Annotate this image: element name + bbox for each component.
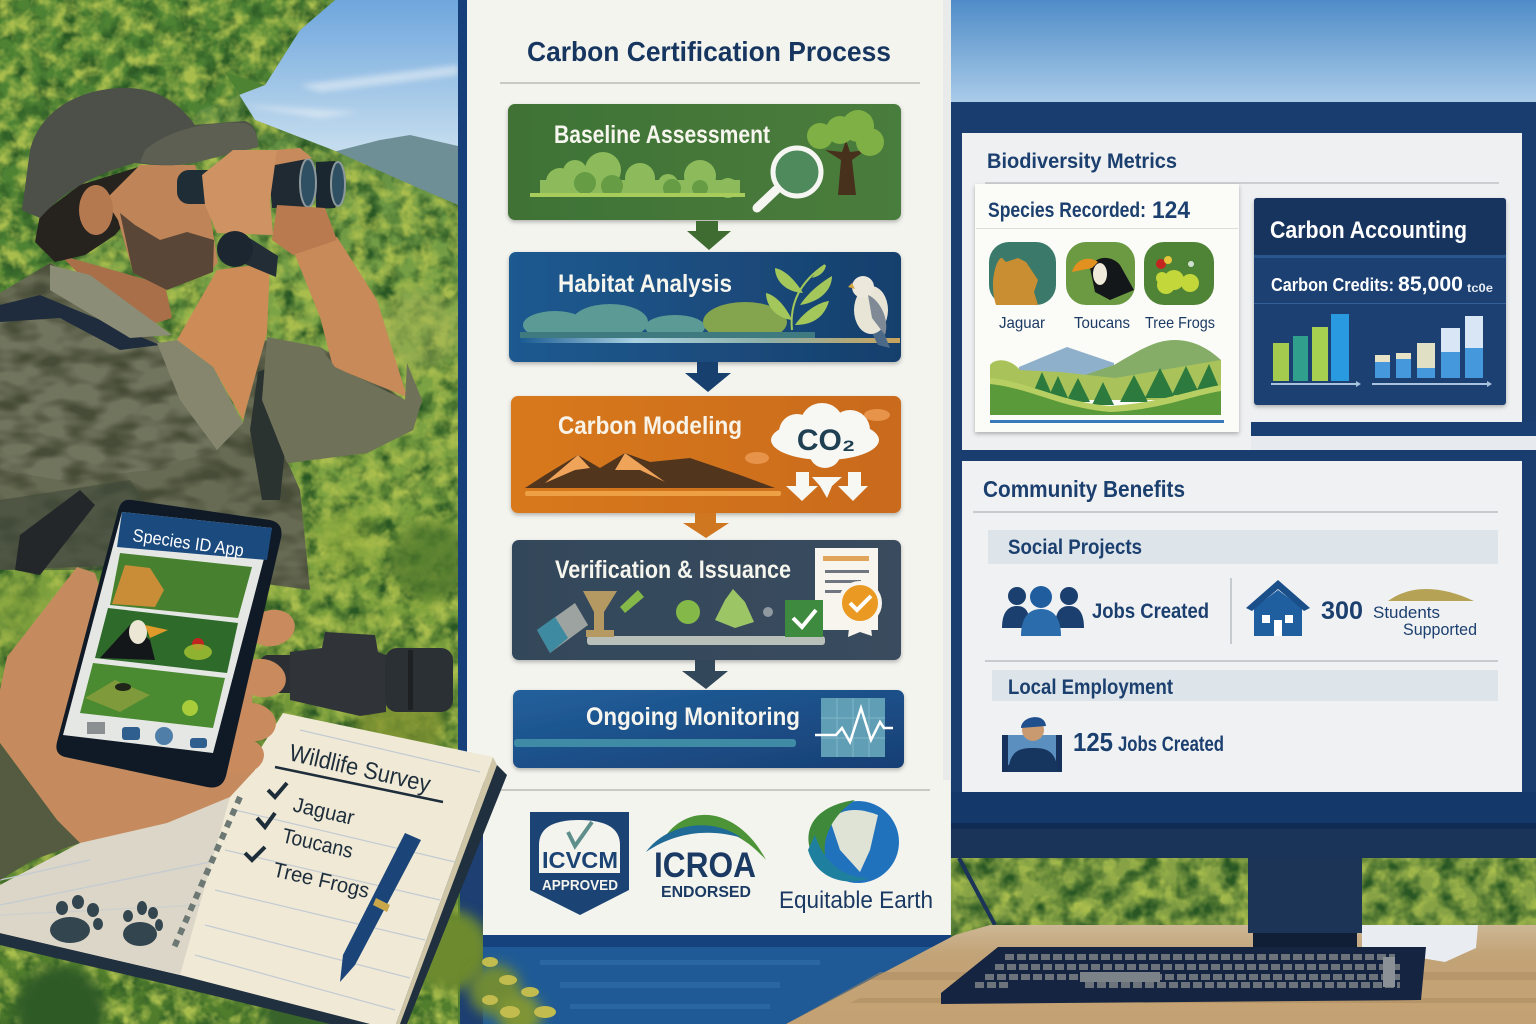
card: species recorded: 124 bbox=[1152, 197, 1191, 224]
icon: plant bbox=[766, 265, 832, 330]
fingers bbox=[215, 606, 298, 776]
arrow bbox=[687, 221, 731, 250]
icon: jaguar bbox=[989, 242, 1056, 305]
step 5: ongoing monitoring: Ongoing Monitoring bbox=[586, 703, 800, 731]
card: carbon accounting: Carbon Accounting bbox=[1270, 217, 1467, 244]
neck bbox=[60, 255, 172, 325]
card: species recorded: Species Recorded: bbox=[988, 199, 1146, 222]
card: species recorded: Toucans bbox=[1074, 315, 1130, 332]
sub-panel: social projects: Supported bbox=[1403, 620, 1477, 639]
monitor bbox=[951, 102, 1536, 962]
near hand bbox=[202, 150, 277, 235]
face bbox=[105, 165, 218, 287]
keyboard bbox=[941, 947, 1426, 1004]
icon: toucan bbox=[1066, 242, 1135, 305]
near rolled cuff bbox=[157, 340, 243, 450]
step 4: verification & issuance: Verification & Issuance bbox=[555, 556, 791, 584]
badge: Equitable Earth bbox=[779, 800, 933, 914]
badge: ICVCM approved: ICVCM bbox=[542, 847, 618, 873]
photo: field researcher with binoculars bbox=[0, 88, 430, 590]
sub-panel: local employment: Local Employment bbox=[1008, 676, 1173, 699]
forearm: far arm bbox=[293, 237, 407, 397]
icon: CO2 cloud bbox=[771, 403, 879, 468]
app tab bar bbox=[87, 722, 207, 748]
hair bbox=[35, 165, 145, 262]
wristwatch bbox=[217, 231, 278, 277]
sleeve cuff bbox=[0, 743, 80, 880]
heading: Carbon Certification Process bbox=[527, 36, 891, 67]
arrow bbox=[685, 362, 731, 392]
panel: community benefits bbox=[962, 461, 1522, 792]
foliage over water bbox=[469, 964, 542, 1024]
ear bbox=[79, 185, 113, 235]
monitor stand bbox=[1248, 858, 1362, 933]
icon: worker bbox=[1002, 717, 1062, 772]
far hand bbox=[272, 205, 337, 255]
heading: Community Benefits bbox=[983, 476, 1185, 502]
binoculars bbox=[177, 158, 345, 209]
icon: down arrows bbox=[786, 472, 868, 501]
notebook: wildlife survey: Tree Frogs bbox=[271, 858, 372, 903]
sub-panel: social projects: Students bbox=[1373, 603, 1440, 622]
phone bbox=[56, 500, 282, 788]
step 5: ongoing monitoring bbox=[513, 690, 904, 768]
arrow bbox=[683, 513, 729, 538]
step 2: habitat analysis: Habitat Analysis bbox=[558, 270, 732, 298]
collar bbox=[50, 265, 172, 338]
spiral binding bbox=[173, 797, 240, 950]
card: carbon accounting: tc0e bbox=[1467, 281, 1493, 295]
step 1: baseline assessment bbox=[508, 104, 901, 220]
arrow bbox=[682, 660, 728, 689]
icon: tree bbox=[825, 140, 866, 195]
step 3: carbon modeling: CO₂ bbox=[797, 424, 855, 457]
forearm: near arm bbox=[177, 263, 270, 420]
step 4: verification & issuance bbox=[512, 540, 901, 660]
badge: ICROA endorsed bbox=[646, 815, 766, 901]
panel: carbon certification process bbox=[458, 0, 955, 1024]
sub-panel: social projects bbox=[988, 530, 1498, 644]
icon: school house bbox=[1246, 580, 1310, 636]
badge: ICVCM approved: APPROVED bbox=[542, 877, 618, 894]
sub-panel: local employment: Jobs Created bbox=[1118, 733, 1224, 756]
notebook: wildlife survey bbox=[0, 713, 507, 1024]
card: carbon accounting: Carbon Credits: bbox=[1271, 275, 1394, 295]
pen bbox=[340, 833, 421, 982]
card: carbon accounting bbox=[1254, 198, 1506, 405]
sub-panel: social projects: Jobs Created bbox=[1092, 600, 1209, 623]
water below panel bbox=[483, 935, 955, 1024]
card: species recorded: Tree Frogs bbox=[1145, 315, 1215, 332]
icon: magnifier bbox=[773, 148, 821, 196]
torso: olive shirt bbox=[0, 263, 422, 590]
background: sky behind monitor bbox=[951, 0, 1536, 938]
card: carbon accounting: 85,000 bbox=[1398, 273, 1463, 296]
badge: ICROA endorsed: ICROA bbox=[654, 846, 756, 885]
notebook: wildlife survey: Jaguar bbox=[291, 793, 356, 830]
card: species recorded: Jaguar bbox=[999, 315, 1046, 332]
camera with lens bbox=[260, 632, 453, 716]
sub-panel: local employment bbox=[992, 670, 1498, 772]
landscape illustration bbox=[990, 340, 1224, 423]
step 3: carbon modeling: Carbon Modeling bbox=[558, 412, 742, 440]
background: forest landscape bbox=[0, 0, 490, 1024]
step 3: carbon modeling bbox=[511, 396, 901, 513]
cap bbox=[22, 88, 258, 218]
step 1: baseline assessment: Baseline Assessment bbox=[554, 121, 771, 149]
monitor base bbox=[1362, 925, 1478, 962]
paw prints bbox=[50, 895, 163, 946]
handwriting: Wildlife Survey bbox=[287, 740, 433, 798]
step 2: habitat analysis bbox=[509, 252, 901, 362]
phone: Species ID App bbox=[131, 525, 245, 561]
badge: ICROA endorsed: ENDORSED bbox=[661, 884, 751, 901]
icon: tree frogs bbox=[1144, 242, 1214, 305]
sub-panel: local employment: 125 bbox=[1073, 727, 1113, 757]
bar chart: left bbox=[1271, 314, 1361, 387]
sub-panel: social projects: 300 bbox=[1321, 597, 1363, 625]
heading: Biodiversity Metrics bbox=[987, 150, 1177, 173]
hand holding phone bbox=[0, 500, 298, 880]
palm and thumb bbox=[0, 567, 255, 843]
sub-panel: social projects: Social Projects bbox=[1008, 536, 1142, 559]
desk bbox=[786, 925, 1536, 1024]
badge: Equitable Earth: Equitable Earth bbox=[779, 887, 933, 914]
card: species recorded bbox=[975, 184, 1239, 432]
bar chart: right bbox=[1372, 316, 1492, 387]
notebook: wildlife survey: Toucans bbox=[280, 824, 355, 863]
far rolled sleeve bbox=[262, 337, 422, 463]
backpack straps bbox=[250, 366, 286, 500]
beard bbox=[120, 213, 214, 290]
icon: people bbox=[1002, 586, 1084, 636]
badge: ICVCM approved bbox=[530, 812, 629, 915]
icon: bird bbox=[848, 276, 890, 348]
